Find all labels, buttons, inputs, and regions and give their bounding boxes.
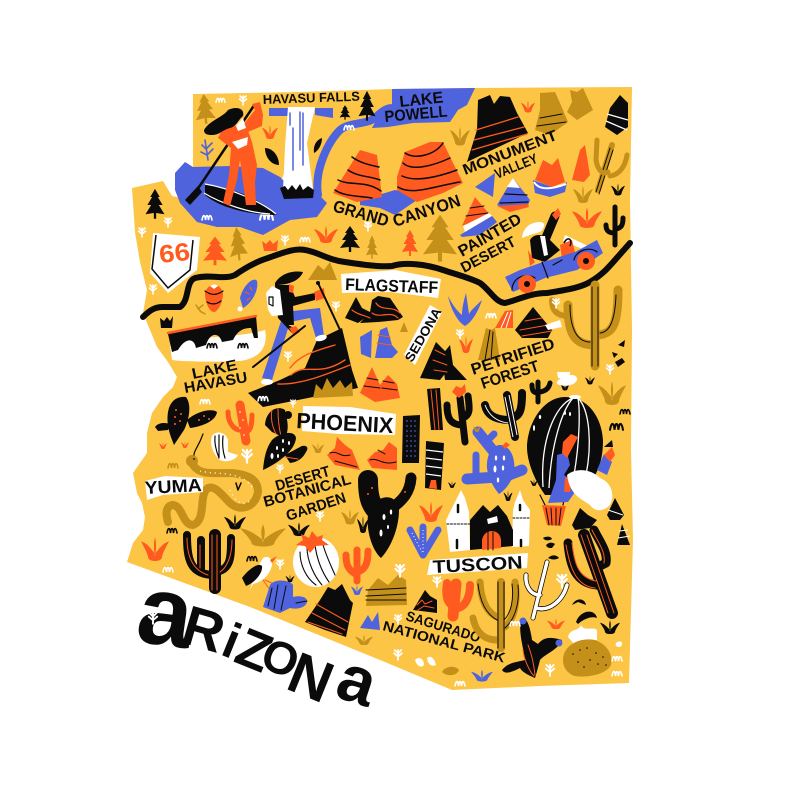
cactus pair below Phoenix (263, 408, 324, 473)
bird (242, 556, 277, 590)
hot air balloon with cactus shape (527, 395, 615, 526)
title: Arizona: N (279, 640, 342, 716)
plants: south east (367, 478, 630, 686)
heading: Petrified Forest: PETRIFIED (469, 336, 557, 379)
heading: Lake Powell (384, 89, 448, 126)
heading: Sagurado National Park: NATIONAL PARK (381, 617, 507, 666)
lake: Lake Powell (372, 88, 475, 128)
plants and rocks: centre right (448, 285, 618, 366)
convertible car with driver (505, 208, 603, 293)
heading: Lake Havasu (183, 357, 249, 397)
heading: Sedona on white label: SEDONA (402, 304, 445, 364)
orange rocks near Phoenix (327, 367, 400, 470)
heading: Havasu Falls: HAVASU FALLS (263, 89, 360, 107)
small road-side items (160, 262, 337, 328)
heading: Grand Canyon (331, 191, 463, 231)
heading: Lake Powell: POWELL (384, 104, 448, 126)
lake: left lake and river (175, 108, 400, 235)
heading: Lake Havasu: HAVASU (183, 369, 249, 397)
title: Arizona: a (329, 639, 388, 721)
heading: Desert Botanical Garden: GARDEN (284, 489, 348, 525)
paddleboarder (185, 102, 277, 215)
heading: Desert Botanical Garden: BOTANICAL (262, 471, 353, 511)
heading: Grand Canyon: GRAND (331, 197, 391, 231)
saguaro and garden plants (141, 509, 369, 590)
heading: Painted Desert: DESERT (458, 233, 519, 277)
plants: west (155, 397, 258, 561)
heading: Monument Valley: VALLEY (492, 150, 540, 182)
monument valley (450, 88, 628, 162)
heading: Lake Powell: LAKE (399, 89, 444, 111)
church Mission (446, 490, 530, 552)
heading: Desert Botanical Garden: DESERT (273, 463, 332, 495)
title: Arizona: i (215, 612, 249, 669)
heading: Phoenix on white label: PHOENIX (296, 408, 394, 438)
heading: Tuscon on white label: TUSCON (432, 552, 523, 577)
heading: Lake Havasu: LAKE (190, 357, 239, 383)
sedona rocks (345, 296, 408, 358)
title: Arizona (131, 553, 388, 721)
highway: road (143, 243, 630, 317)
city buildings (402, 415, 444, 490)
heading: Sagurado National Park: SAGURADO (404, 608, 483, 645)
heading: Monument Valley: MONUMENT (460, 127, 560, 179)
bridge over Lake Havasu (168, 316, 266, 362)
grand canyon rocks (333, 142, 463, 202)
title: Arizona: Z (228, 616, 281, 684)
heading: Flagstaff on white label: FLAGSTAFF (345, 275, 438, 297)
hiker on a mountain (248, 272, 358, 407)
heading: Desert Botanical Garden (262, 463, 353, 525)
heading: Petrified Forest: FOREST (479, 358, 541, 393)
heading: Grand Canyon: CANYON (390, 191, 463, 231)
map: state of Arizona (127, 87, 633, 690)
icon: route 66 shield: 66 (158, 238, 191, 269)
blue cactus (467, 425, 522, 494)
plants: north-west (146, 91, 376, 219)
petrified forest plants (420, 336, 630, 442)
blue cactus and bottom plants (263, 575, 437, 645)
heading: Yuma on white label: YUMA (144, 475, 202, 498)
title: Arizona: O (254, 627, 307, 689)
waterfall (269, 107, 333, 199)
title: Arizona: R (176, 593, 232, 665)
title: Arizona: a (131, 553, 202, 670)
heading: Painted Desert: PAINTED (456, 211, 525, 260)
river strip under canyon (360, 190, 417, 215)
painted desert rocks (460, 140, 627, 245)
trees along the road (138, 215, 457, 294)
icon: route 66 shield (150, 233, 200, 293)
